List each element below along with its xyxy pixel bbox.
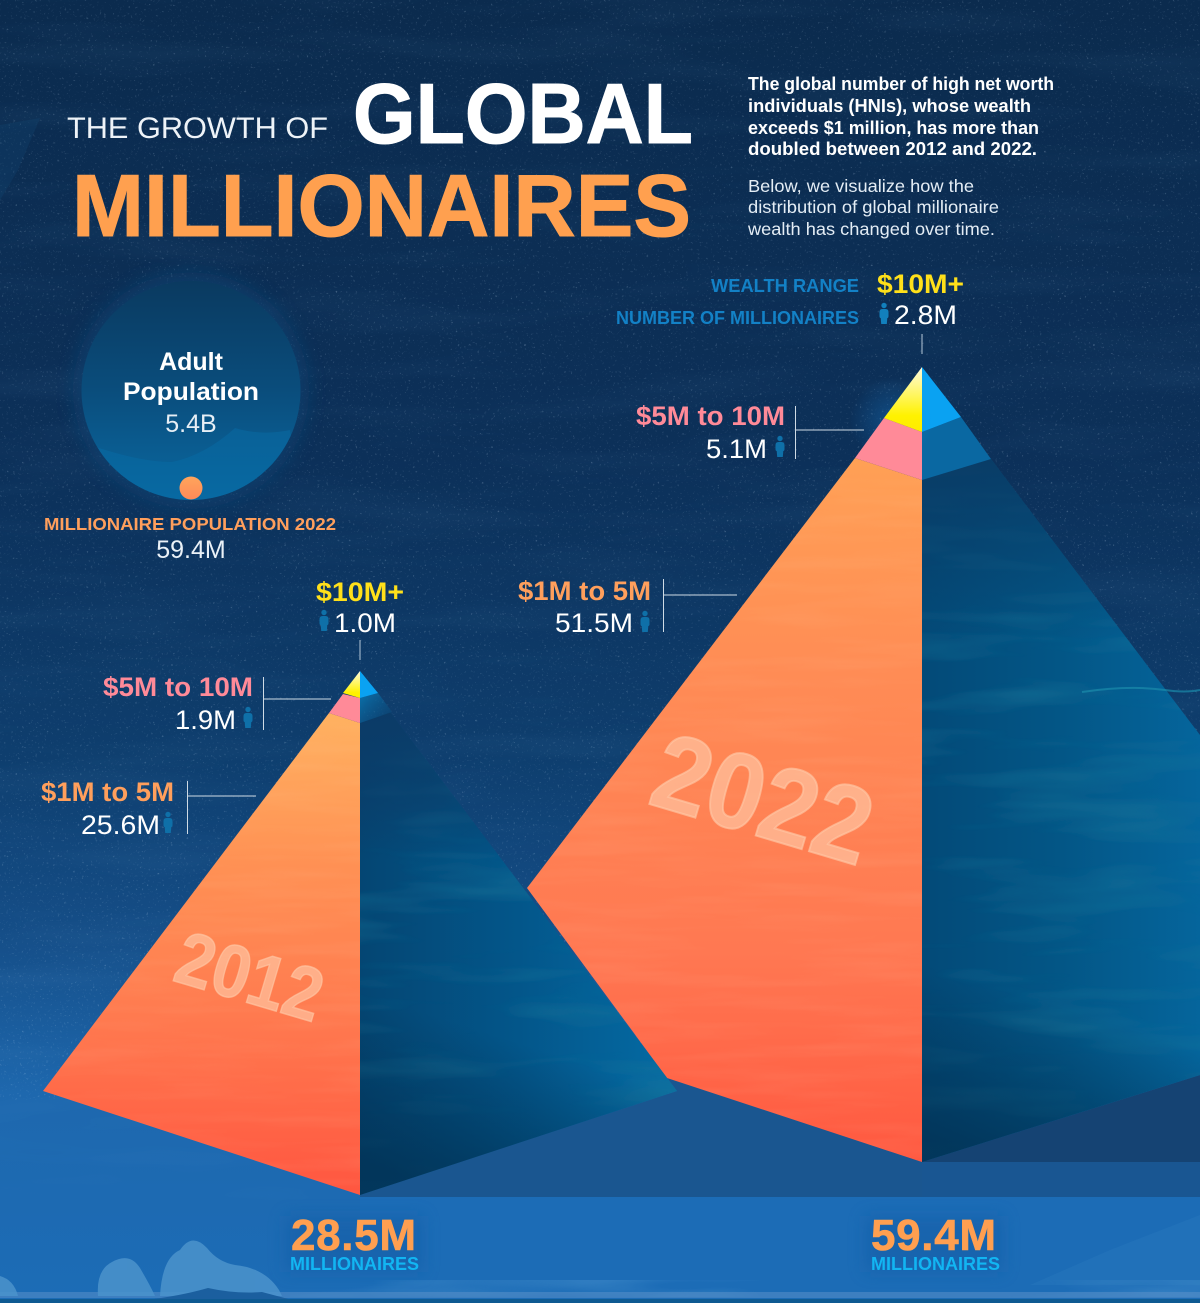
label: $1M to 5M 2022: 51.5M <box>555 608 633 638</box>
millionaire population 2022 <box>44 514 336 564</box>
intro text: The global number of high net worth <box>748 74 1054 94</box>
ground band <box>0 1075 1200 1303</box>
millionaire population 2022: MILLIONAIRE POPULATION 2022 <box>44 514 336 534</box>
orange tier 2022 <box>527 458 922 1162</box>
adult population label: 5.4B <box>165 410 217 438</box>
label: $10M+ 2012: $10M+ <box>316 577 404 607</box>
title <box>67 67 693 255</box>
pyramid 2022 <box>527 367 1200 1162</box>
mountain silhouette <box>146 1288 292 1300</box>
total 2012: 28.5M <box>291 1211 416 1260</box>
right blue tier 2022 <box>922 417 991 480</box>
label: $5M to 10M 2012: $5M to 10M <box>103 672 253 702</box>
label: $10M+ 2022: 2.8M <box>894 300 957 330</box>
label: $10M+ 2022: $10M+ <box>877 269 964 299</box>
right bright tier 2012 <box>360 671 378 698</box>
right dark face 2022 <box>922 459 1200 1162</box>
label: $1M to 5M 2022: $1M to 5M <box>518 576 651 606</box>
label: $1M to 5M 2012 <box>41 777 256 840</box>
adult population label: Adult <box>159 348 224 376</box>
icon: person <box>880 303 888 324</box>
intro text: individuals (HNIs), whose wealth <box>748 96 1031 116</box>
legend: wealth range: WEALTH RANGE <box>711 276 859 296</box>
adult population label: Population <box>123 378 259 406</box>
title word: global: GLOBAL <box>353 67 693 162</box>
right blue tier 2012 <box>360 693 392 723</box>
label: $5M to 10M 2012: 1.9M <box>175 705 236 735</box>
millionaire dot <box>180 476 202 500</box>
pyramid 2012 <box>43 671 677 1195</box>
label: $10M+ 2012: 1.0M <box>334 608 396 638</box>
label: $1M to 5M 2022 <box>518 576 737 638</box>
pink tier 2012 <box>329 694 360 723</box>
year 2022: 2022 <box>639 709 887 888</box>
total 2022: MILLIONAIRES <box>871 1254 1000 1274</box>
label: $5M to 10M 2022: 5.1M <box>706 434 767 464</box>
icon: person <box>640 611 650 632</box>
title word: millionaires: MILLIONAIRES <box>72 156 691 255</box>
label: $5M to 10M 2012 <box>103 672 331 735</box>
total 2012: MILLIONAIRES <box>290 1254 419 1274</box>
pink tier 2022 <box>855 418 922 480</box>
year 2012: 2012 <box>166 915 333 1038</box>
icon: person <box>244 707 252 728</box>
icon: person <box>776 436 784 457</box>
intro text: wealth has changed over time. <box>747 219 995 239</box>
labels 2022 <box>518 269 964 638</box>
legend: number of millionaires: NUMBER OF MILLIONAIRES <box>616 308 859 328</box>
millionaire population 2022: 59.4M <box>156 536 226 564</box>
yellow tier 2012 <box>343 671 360 698</box>
intro text: doubled between 2012 and 2022. <box>748 139 1037 159</box>
labels 2012 <box>41 577 404 840</box>
intro text <box>747 74 1054 239</box>
label: $10M+ 2012 <box>316 577 404 660</box>
clouds <box>0 1240 282 1296</box>
right dark face 2012 <box>360 712 677 1195</box>
intro text: distribution of global millionaire <box>748 197 999 217</box>
label: $1M to 5M 2012: 25.6M <box>81 810 160 840</box>
icon: person <box>320 610 328 631</box>
orange tier 2012 <box>43 713 360 1195</box>
adult population circle <box>73 272 309 508</box>
adult population label <box>123 348 259 438</box>
intro text: Below, we visualize how the <box>748 176 974 196</box>
glow behind apex 2022 <box>850 378 934 462</box>
label: $5M to 10M 2022: $5M to 10M <box>636 401 785 431</box>
label: $1M to 5M 2012: $1M to 5M <box>41 777 174 807</box>
label: $5M to 10M 2022 <box>636 401 864 464</box>
icon: person <box>164 812 172 833</box>
right bright tier 2022 <box>922 367 961 432</box>
intro text: exceeds $1 million, has more than <box>748 118 1039 138</box>
label: $10M+ 2022 <box>877 269 964 354</box>
total 2022: 59.4M <box>871 1211 996 1260</box>
yellow tier 2022 <box>884 367 922 432</box>
title line: the growth of: THE GROWTH OF <box>67 112 328 145</box>
